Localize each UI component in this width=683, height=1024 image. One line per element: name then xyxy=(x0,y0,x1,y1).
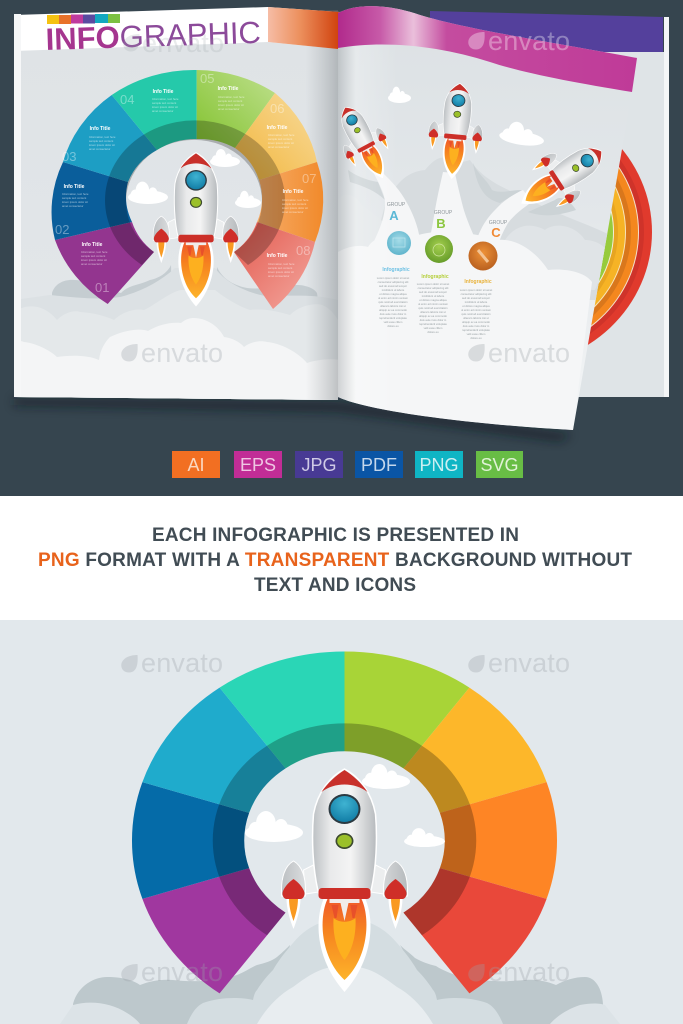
light blue segment xyxy=(142,688,286,813)
group column text: aliquip ex ea commodo xyxy=(462,320,490,324)
segment body text: Information, text here xyxy=(62,192,88,196)
left page small clouds xyxy=(128,149,261,208)
group column text xyxy=(377,267,492,340)
lower panel clouds xyxy=(60,919,620,1024)
group column text: reprehenderit voluptate xyxy=(379,316,407,320)
segment 05 xyxy=(197,70,275,148)
segment titles: Info Title xyxy=(82,242,103,248)
badge JPG xyxy=(295,451,343,478)
badge JPG: JPG xyxy=(301,455,337,475)
group column text: velit esse cillum xyxy=(424,326,443,330)
segment numbers: 08 xyxy=(296,243,310,258)
segment body text: sample text content xyxy=(62,196,86,200)
segment titles: Info Title xyxy=(218,86,239,92)
lower panel rocket xyxy=(282,769,408,992)
group column text: Lorem ipsum dolor sit amet xyxy=(377,277,409,280)
group labels: B xyxy=(436,216,446,231)
segment numbers: 02 xyxy=(55,222,69,237)
segment titles: Info Title xyxy=(90,126,111,132)
watermark upper right page: envato xyxy=(488,338,570,368)
purple segment xyxy=(142,868,286,993)
segment body text: lorem ipsum dolor sit xyxy=(152,105,178,109)
segment body text: lorem ipsum dolor sit xyxy=(89,143,115,147)
segment body text: amet consectetur xyxy=(282,210,304,214)
segment body text: Information, text here xyxy=(89,135,115,139)
segment numbers: 01 xyxy=(95,280,109,295)
segment body text: sample text content xyxy=(152,101,176,105)
group column text: Infographic xyxy=(464,279,492,285)
group column text: Infographic xyxy=(421,274,449,280)
title: INFOGRAPHIC xyxy=(45,15,261,57)
group column text: sed do eiusmod tempor xyxy=(462,296,490,300)
group column text: et dolore magna aliqua xyxy=(462,304,490,308)
segment titles: Info Title xyxy=(64,184,85,190)
front page clouds and trails xyxy=(338,158,610,430)
watermark lower row two left: envato xyxy=(141,957,223,987)
segment 04 xyxy=(112,70,197,150)
group column text: reprehenderit voluptate xyxy=(419,322,447,326)
segment body text: amet consectetur xyxy=(62,204,84,208)
group column text: ullamco laboris nisi ut xyxy=(463,316,489,320)
segment 01 xyxy=(55,222,154,304)
group column text: incididunt ut labore xyxy=(465,300,488,304)
segment body text xyxy=(62,95,309,278)
watermark top left: envato xyxy=(142,28,224,58)
segment titles: Info Title xyxy=(267,253,288,259)
segment body text: sample text content xyxy=(81,254,105,258)
group column text: Infographic xyxy=(382,267,410,273)
group column text: consectetur adipiscing elit xyxy=(461,292,492,296)
badge PDF: PDF xyxy=(361,455,397,475)
dark blue segment xyxy=(132,782,249,899)
yellow segment xyxy=(403,688,547,813)
dark inner ring xyxy=(105,120,285,265)
group column text: incididunt ut labore xyxy=(382,288,405,292)
group labels: GROUP xyxy=(489,220,508,226)
group column text: sed do eiusmod tempor xyxy=(419,290,447,294)
magazine mockup xyxy=(14,6,669,442)
left page clouds xyxy=(14,265,340,400)
badge PNG xyxy=(415,451,463,478)
group column text: consectetur adipiscing elit xyxy=(418,286,449,290)
group column text: dolore eu xyxy=(427,330,439,334)
front page magenta header band xyxy=(338,6,637,92)
badge PDF xyxy=(355,451,403,478)
segment numbers: 06 xyxy=(270,101,284,116)
group column text: consectetur adipiscing elit xyxy=(378,280,409,284)
teal segment xyxy=(220,652,344,768)
group B icon ball xyxy=(425,235,453,263)
group column text: velit esse cillum xyxy=(467,332,486,336)
lower light panel xyxy=(0,620,683,1024)
segment titles: Info Title xyxy=(267,125,288,131)
green segment xyxy=(344,652,469,768)
badge AI: AI xyxy=(187,455,205,475)
badge SVG xyxy=(476,451,523,478)
segment body text: amet consectetur xyxy=(89,147,111,151)
front right page xyxy=(338,6,637,430)
back page rainbow arcs xyxy=(368,97,652,367)
title color swatches xyxy=(47,14,120,24)
group labels: C xyxy=(491,225,501,240)
group column text: duis aute irure dolor in xyxy=(420,318,447,322)
segment body text: lorem ipsum dolor sit xyxy=(268,270,294,274)
segment body text: amet consectetur xyxy=(152,109,174,113)
group column text: quis nostrud exercitation xyxy=(461,312,491,316)
segment 03 xyxy=(63,95,157,182)
segment body text: Information, text here xyxy=(81,250,107,254)
group column text: dolore eu xyxy=(470,336,482,340)
large donut chart xyxy=(132,652,557,993)
group column text: Lorem ipsum dolor sit amet xyxy=(417,283,449,286)
group column text: duis aute irure dolor in xyxy=(380,312,407,316)
group column text: sed do eiusmod tempor xyxy=(379,284,407,288)
rocket right xyxy=(506,129,616,226)
group column text: ullamco laboris nisi ut xyxy=(380,304,406,308)
red segment xyxy=(403,868,547,993)
envato watermarks xyxy=(121,26,570,987)
watermark lower row one left: envato xyxy=(141,648,223,678)
segment body text: sample text content xyxy=(268,137,292,141)
badge EPS xyxy=(234,451,282,478)
group column text: quis nostrud exercitation xyxy=(418,306,448,310)
dark inner ring xyxy=(213,723,476,935)
group column text: incididunt ut labore xyxy=(422,294,445,298)
group labels: GROUP xyxy=(387,202,406,208)
dark background panel xyxy=(0,0,683,496)
left page colored header band xyxy=(268,7,340,49)
group column text: dolore eu xyxy=(387,324,399,328)
segment body text: amet consectetur xyxy=(218,107,240,111)
format badges xyxy=(172,451,523,478)
segment body text: Information, text here xyxy=(218,95,244,99)
caption text: TEXT AND ICONS xyxy=(254,575,416,596)
segment body text: Information, text here xyxy=(268,262,294,266)
segment titles xyxy=(64,86,304,259)
segment body text: amet consectetur xyxy=(81,262,103,266)
segment titles: Info Title xyxy=(283,189,304,195)
segment body text: lorem ipsum dolor sit xyxy=(81,258,107,262)
segment 07 xyxy=(257,162,323,242)
group labels: A xyxy=(389,208,399,223)
watermark lower row one right: envato xyxy=(488,648,570,678)
badge PNG: PNG xyxy=(419,455,459,475)
rocket center xyxy=(425,81,487,181)
group labels: GROUP xyxy=(434,210,453,216)
segment numbers: 07 xyxy=(302,171,316,186)
segment titles: Info Title xyxy=(153,89,174,95)
segment body text: Information, text here xyxy=(282,198,308,202)
group column text: Lorem ipsum dolor sit amet xyxy=(460,289,492,292)
group A icon ball xyxy=(387,231,411,255)
left page rocket donut chart xyxy=(52,70,323,309)
badge AI xyxy=(172,451,220,478)
group column text: ut enim ad minim veniam xyxy=(378,296,409,300)
group column text: aliquip ex ea commodo xyxy=(419,314,447,318)
group column text: aliquip ex ea commodo xyxy=(379,308,407,312)
group column text: ut enim ad minim veniam xyxy=(418,302,449,306)
badge SVG: SVG xyxy=(480,455,519,475)
caption text: EACH INFOGRAPHIC IS PRESENTED IN xyxy=(152,525,519,546)
group column text: et dolore magna aliqua xyxy=(419,298,447,302)
group labels xyxy=(387,202,508,240)
segment body text: sample text content xyxy=(268,266,292,270)
orange segment xyxy=(440,782,557,899)
segment numbers xyxy=(55,71,316,295)
back page with purple header xyxy=(430,11,669,397)
group column text: reprehenderit voluptate xyxy=(462,328,490,332)
group C icon ball xyxy=(468,242,498,270)
front page small clouds xyxy=(388,87,546,148)
caption text xyxy=(38,525,632,596)
group column text: ullamco laboris nisi ut xyxy=(420,310,446,314)
segment 08 xyxy=(234,222,315,309)
book shadow xyxy=(14,398,572,442)
segment numbers: 04 xyxy=(120,92,134,107)
group column text: velit esse cillum xyxy=(384,320,403,324)
watermark lower row two right: envato xyxy=(488,957,570,987)
group column text: duis aute irure dolor in xyxy=(463,324,490,328)
group column text: ut enim ad minim veniam xyxy=(461,308,492,312)
white caption band xyxy=(0,496,683,620)
segment body text: amet consectetur xyxy=(268,274,290,278)
segment body text: sample text content xyxy=(89,139,113,143)
segment body text: Information, text here xyxy=(152,97,178,101)
caption text: PNG FORMAT WITH A TRANSPARENT BACKGROUND WITHOUT xyxy=(38,550,632,571)
group column text: quis nostrud exercitation xyxy=(378,300,408,304)
segment body text: lorem ipsum dolor sit xyxy=(282,206,308,210)
left page rocket xyxy=(153,153,239,307)
left page xyxy=(14,7,340,400)
segment body text: lorem ipsum dolor sit xyxy=(218,103,244,107)
segment body text: lorem ipsum dolor sit xyxy=(62,200,88,204)
lower panel small clouds xyxy=(245,764,445,847)
segment numbers: 03 xyxy=(62,149,76,164)
group column text: et dolore magna aliqua xyxy=(379,292,407,296)
segment body text: lorem ipsum dolor sit xyxy=(268,141,294,145)
segment body text: sample text content xyxy=(218,99,242,103)
badge EPS: EPS xyxy=(240,455,276,475)
watermark top right: envato xyxy=(488,26,570,56)
watermark upper left page: envato xyxy=(141,338,223,368)
segment body text: sample text content xyxy=(282,202,306,206)
segment body text: Information, text here xyxy=(268,133,294,137)
segment 02 xyxy=(52,162,132,240)
segment numbers: 05 xyxy=(200,71,214,86)
segment 06 xyxy=(235,93,317,180)
rocket left xyxy=(325,97,403,189)
segment body text: amet consectetur xyxy=(268,145,290,149)
